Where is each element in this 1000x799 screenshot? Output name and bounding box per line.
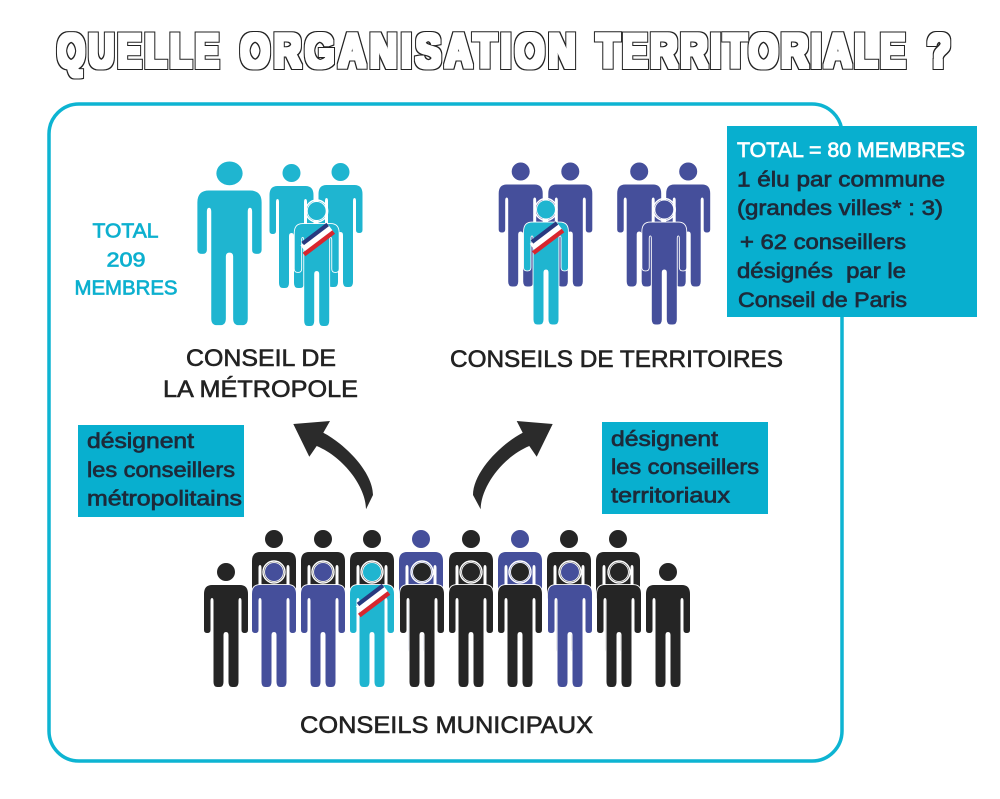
label: conseil de la métropole: [163, 345, 358, 403]
icon: person 2: [548, 162, 592, 286]
callout: total 80 membres: [727, 126, 977, 317]
icon: person with sash: [524, 198, 568, 324]
title: ?: [928, 25, 950, 78]
icon: person back left: [270, 164, 314, 288]
icon group: conseil de la métropole: [197, 162, 362, 326]
callout: total 80 membres: désignés par le: [737, 260, 906, 283]
callout: total 80 membres: + 62 conseillers: [740, 231, 906, 254]
callout: désignent les conseillers métropolitains: désignent: [87, 430, 194, 453]
callout: total 80 membres: TOTAL = 80 MEMBRES: [737, 139, 965, 162]
callout: total 80 membres: (grandes villes* : 3): [737, 197, 943, 220]
callout: total 80 membres: 1 élu par commune: [737, 168, 945, 192]
callout: total 80 membres: Conseil de Paris: [738, 289, 907, 312]
icon: large person: [197, 162, 262, 325]
panel: main frame: [49, 104, 842, 761]
label: conseil de la métropole: LA MÉTROPOLE: [163, 376, 358, 403]
text: total 209 membres: MEMBRES: [74, 278, 178, 300]
text: total 209 membres: TOTAL: [92, 220, 158, 242]
icon: person 4: [666, 162, 710, 286]
icon: person back right: [318, 163, 362, 287]
callout: désignent les conseillers métropolitains: [78, 425, 244, 517]
icon group: conseils municipaux: [204, 530, 690, 687]
callout: désignent les conseillers métropolitains: métropolitains: [87, 488, 242, 510]
icon group: conseils de territoires: [499, 162, 710, 324]
callout: désignent les conseillers territoriaux: les conseillers: [611, 456, 759, 479]
callout: désignent les conseillers territoriaux: [602, 422, 768, 514]
title: ORGANISATION: [240, 25, 576, 78]
callout: désignent les conseillers territoriaux: désignent: [611, 428, 718, 451]
label: conseils municipaux: CONSEILS MUNICIPAUX: [300, 712, 593, 739]
text: total 209 membres: 209: [106, 250, 146, 272]
title: TERRITORIALE: [596, 25, 905, 78]
callout: désignent les conseillers métropolitains: les conseillers: [87, 459, 235, 482]
title: [58, 24, 950, 78]
icon: person 1: [499, 162, 543, 286]
label: conseil de la métropole: CONSEIL DE: [186, 345, 336, 372]
label: conseils de territoires: CONSEILS DE TERRITOIRES: [450, 346, 783, 373]
callout: désignent les conseillers territoriaux: territoriaux: [611, 484, 731, 508]
icon: front person: [642, 198, 686, 324]
arrow: to métropole: [293, 421, 373, 509]
icon: person with sash: [295, 200, 339, 326]
icons: front row: [204, 561, 690, 687]
title: QUELLE: [58, 24, 219, 77]
icon: person 3: [617, 162, 661, 286]
icons: back row: [252, 530, 640, 654]
arrow: to territoires: [473, 421, 553, 509]
text: total 209 membres: [74, 220, 178, 300]
